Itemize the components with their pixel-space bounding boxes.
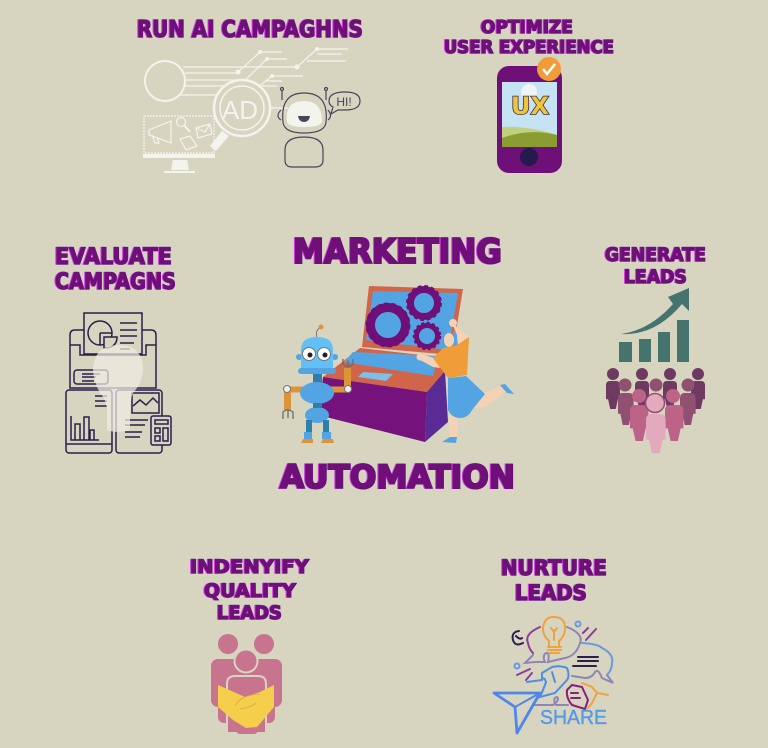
heading: optimize user experience: USER EXPERIENCE (444, 38, 614, 58)
heading: optimize user experience: OPTIMIZE (481, 18, 573, 38)
heading: evaluate campaigns (55, 245, 176, 295)
laptop (318, 286, 463, 442)
icon: UX phone: UX (511, 92, 549, 120)
icon: team handshake (211, 634, 282, 734)
heading: generate leads: LEADS (624, 266, 687, 288)
icon: reports and lightbulb (66, 313, 171, 453)
heading: identify quality leads: QUALITY (204, 580, 296, 602)
heading: identify quality leads: LEADS (217, 602, 282, 624)
heading: generate leads (605, 244, 706, 288)
icon: AI advertising illustration (143, 47, 360, 173)
panel: central marketing automation (280, 232, 515, 496)
panel: generate leads (605, 244, 706, 453)
heading: nurture leads: NURTURE (501, 556, 607, 580)
icon: share conversation (494, 617, 613, 733)
heading: nurture leads: LEADS (515, 581, 587, 605)
panel: identify quality leads (190, 556, 309, 734)
panel: run AI campaigns (137, 17, 363, 173)
icon: crowd of people (606, 368, 705, 453)
heading: optimize user experience (444, 18, 614, 58)
panel: nurture leads (494, 556, 613, 733)
icon: UX phone (497, 57, 562, 173)
robot (283, 324, 353, 443)
heading: run AI campaigns: RUN AI CAMPAGHNS (137, 17, 363, 43)
icon: share conversation: SHARE (540, 706, 607, 729)
heading: evaluate campaigns: EVALUATE (55, 245, 172, 270)
icon: growth chart (619, 288, 689, 362)
icon: AI advertising illustration: AD (222, 95, 258, 125)
icon: AI advertising illustration: HI! (336, 95, 352, 109)
heading: evaluate campaigns: CAMPAGNS (55, 270, 176, 295)
woman (416, 319, 514, 443)
panel: evaluate campaigns (55, 245, 176, 453)
heading: automation: AUTOMATION (280, 458, 515, 496)
panel: optimize user experience (444, 18, 614, 173)
illustration: robot and woman with laptop (283, 286, 514, 443)
heading: marketing: MARKETING (293, 232, 502, 272)
heading: generate leads: GENERATE (605, 244, 706, 266)
heading: identify quality leads (190, 556, 309, 624)
heading: nurture leads (501, 556, 607, 605)
heading: identify quality leads: INDENYIFY (190, 556, 309, 578)
